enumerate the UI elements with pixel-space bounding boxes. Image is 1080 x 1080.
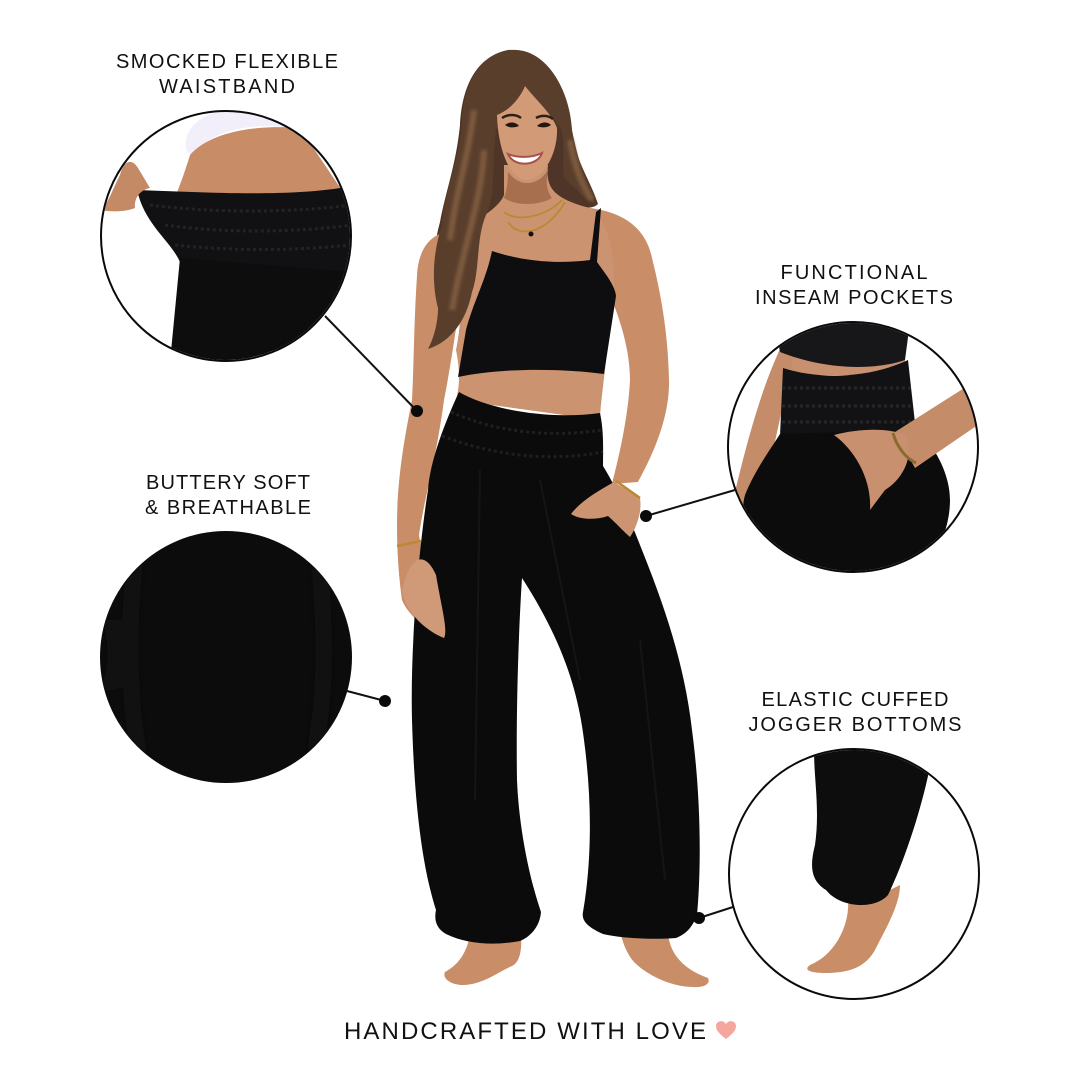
- waistband smocking: [442, 412, 603, 457]
- pointer: pockets: [640, 490, 735, 522]
- pointer: cuffs: [693, 907, 733, 924]
- left arm: [397, 232, 460, 638]
- pants body: [170, 258, 352, 362]
- smocked band: [780, 360, 916, 436]
- bracelet: [893, 433, 916, 463]
- pants leg: [812, 750, 933, 905]
- label: buttery soft and breathable: & BREATHABLE: [145, 497, 311, 519]
- pants folds: [475, 470, 665, 880]
- neck shadow: [504, 170, 552, 204]
- hair back: [428, 50, 598, 348]
- pants: [412, 392, 700, 944]
- callout circle: jogger cuffs: [729, 749, 979, 999]
- crop top: [458, 208, 616, 377]
- hand: [100, 162, 150, 211]
- back skin: [176, 127, 345, 195]
- label: elastic cuffed jogger bottoms: ELASTIC CUFFED: [762, 689, 948, 711]
- model figure: [397, 50, 709, 987]
- label: functional inseam pockets: FUNCTIONAL: [780, 262, 928, 284]
- bracelets: [397, 481, 640, 546]
- left arm: [736, 345, 790, 504]
- label: elastic cuffed jogger bottoms: [748, 689, 962, 736]
- torso and neck: [440, 165, 614, 420]
- eyebrows: [502, 115, 553, 119]
- right foot: [620, 930, 709, 987]
- hair highlights: [450, 110, 592, 310]
- pants: [743, 430, 950, 575]
- pointer: fabric: [347, 691, 391, 707]
- callout circle: buttery soft fabric: [100, 531, 352, 783]
- callout circle: inseam pockets: [728, 322, 985, 575]
- label: buttery soft and breathable: BUTTERY SOFT: [146, 472, 310, 494]
- right arm: [590, 208, 669, 484]
- black top: [775, 322, 910, 367]
- pointer: waistband: [325, 316, 423, 417]
- label: functional inseam pockets: [755, 262, 953, 309]
- label: smocked flexible waistband: SMOCKED FLEXIBLE: [116, 51, 338, 73]
- label: elastic cuffed jogger bottoms: JOGGER BOTTOMS: [748, 714, 962, 736]
- label: functional inseam pockets: INSEAM POCKETS: [755, 287, 953, 309]
- skin midriff: [790, 356, 905, 375]
- stretched waistband: [137, 186, 352, 275]
- left foot: [444, 935, 521, 985]
- face: [497, 86, 557, 180]
- forearm: [895, 389, 976, 468]
- label: smocked flexible waistband: [116, 51, 338, 98]
- left hand: [402, 559, 445, 638]
- necklaces: [504, 200, 565, 232]
- foot: [807, 885, 900, 973]
- smile: [508, 153, 542, 164]
- footer tagline: HANDCRAFTED WITH LOVE: [344, 1018, 706, 1045]
- pendant: [528, 232, 534, 236]
- hair front: [428, 50, 597, 349]
- eyes: [505, 122, 551, 127]
- legs and feet: [444, 930, 709, 987]
- white top: [186, 112, 284, 154]
- label: buttery soft and breathable: [145, 472, 311, 519]
- icon: heart: [716, 1021, 736, 1039]
- right hand at pocket: [571, 482, 641, 537]
- fabric folds: [108, 560, 324, 760]
- label: smocked flexible waistband: WAISTBAND: [159, 76, 295, 98]
- hand in pocket: [834, 430, 909, 510]
- smocking lines: [150, 205, 352, 250]
- callout circle: smocked waistband: [100, 111, 352, 362]
